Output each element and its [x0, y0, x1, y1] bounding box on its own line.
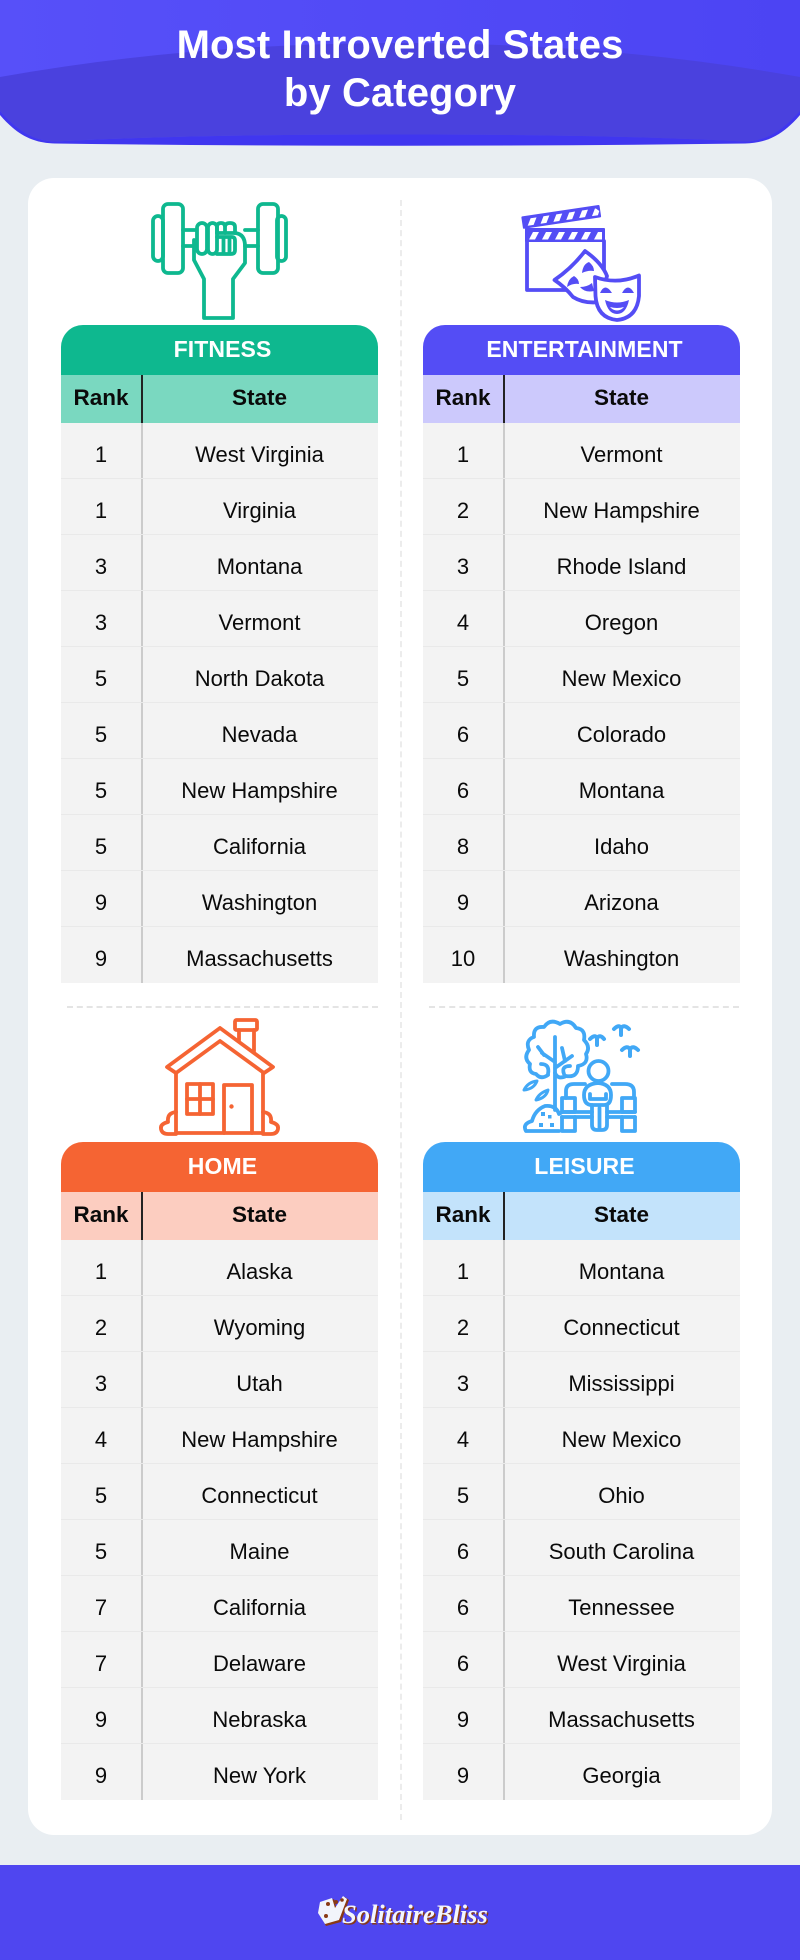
leisure rows: Connecticut — [563, 1315, 680, 1340]
icon: person on park bench under tree — [522, 1020, 640, 1133]
entertainment rows: 8 — [457, 834, 469, 859]
entertainment rows: Rhode Island — [557, 554, 686, 579]
person — [588, 1061, 608, 1081]
entertainment rows: Oregon — [585, 610, 658, 635]
home rows: California — [213, 1595, 306, 1620]
entertainment rows: 5 — [457, 666, 469, 691]
column headers: Rank — [73, 385, 129, 410]
fitness rows: Nevada — [222, 722, 297, 747]
logo wordmark: SolitaireBliss — [342, 1899, 488, 1929]
column headers: State — [594, 1202, 649, 1227]
fitness rows: Montana — [217, 554, 302, 579]
fitness rows: Massachusetts — [186, 946, 333, 971]
home rows: Utah — [236, 1371, 283, 1396]
home rows: 7 — [95, 1651, 107, 1676]
leaves — [524, 1081, 548, 1100]
fitness rows: California — [213, 834, 306, 859]
panel: home table — [61, 1142, 378, 1800]
column headers: State — [232, 1202, 287, 1227]
entertainment rows: Idaho — [594, 834, 649, 859]
horizontal dashed divider left — [67, 1006, 378, 1008]
leisure rows: West Virginia — [557, 1651, 686, 1676]
clapper board — [525, 228, 605, 290]
fitness rows: 5 — [95, 722, 107, 747]
leisure rows: 6 — [457, 1595, 469, 1620]
heading: home — [61, 1142, 378, 1192]
entertainment rows: Washington — [564, 946, 679, 971]
icon: clapperboard with theatre masks — [521, 205, 641, 322]
title — [177, 23, 623, 115]
fitness rows: North Dakota — [195, 666, 324, 691]
column headers — [61, 1192, 378, 1240]
home rows: New Hampshire — [181, 1427, 338, 1452]
entertainment rows: 9 — [457, 890, 469, 915]
entertainment rows — [423, 423, 740, 983]
home rows: Alaska — [226, 1259, 293, 1284]
white content card — [28, 178, 772, 1835]
leisure rows: New Mexico — [562, 1427, 681, 1452]
heading: home: HOME — [188, 1153, 257, 1179]
entertainment rows: 4 — [457, 610, 469, 635]
fitness rows: 9 — [95, 946, 107, 971]
entertainment rows: 10 — [451, 946, 475, 971]
home rows: Wyoming — [214, 1315, 305, 1340]
fitness rows: Vermont — [219, 610, 300, 635]
fitness rows: 5 — [95, 778, 107, 803]
heading: leisure — [423, 1142, 740, 1192]
tree — [526, 1022, 588, 1077]
leisure rows — [423, 1240, 740, 1800]
leisure rows: 4 — [457, 1427, 469, 1452]
heading: entertainment — [423, 325, 740, 375]
entertainment rows: Colorado — [577, 722, 666, 747]
leisure rows: Georgia — [582, 1763, 661, 1788]
entertainment rows: New Mexico — [562, 666, 681, 691]
fitness rows: 3 — [95, 554, 107, 579]
column headers — [423, 375, 740, 423]
heading: fitness — [61, 325, 378, 375]
column headers: State — [594, 385, 649, 410]
icon: playing cards — [318, 1896, 349, 1926]
entertainment rows: 2 — [457, 498, 469, 523]
home rows: 4 — [95, 1427, 107, 1452]
column headers: Rank — [73, 1202, 129, 1227]
fitness rows — [61, 423, 378, 983]
leisure rows: South Carolina — [549, 1539, 694, 1564]
bush — [525, 1106, 562, 1131]
leisure rows: Montana — [579, 1259, 664, 1284]
home rows: New York — [213, 1763, 306, 1788]
tragedy mask — [554, 251, 607, 302]
clapper arm — [521, 205, 601, 229]
fitness rows: Virginia — [223, 498, 296, 523]
home rows: Maine — [230, 1539, 289, 1564]
entertainment rows: 1 — [457, 442, 469, 467]
panel: fitness table — [61, 325, 378, 983]
leisure rows: 1 — [457, 1259, 469, 1284]
leisure rows: Tennessee — [568, 1595, 675, 1620]
home rows: Delaware — [213, 1651, 306, 1676]
column headers: Rank — [435, 1202, 491, 1227]
fitness rows: 9 — [95, 890, 107, 915]
icon: house — [159, 1018, 280, 1136]
home rows: Nebraska — [212, 1707, 307, 1732]
panel: entertainment table — [423, 325, 740, 983]
heading: fitness: FITNESS — [174, 336, 271, 362]
birds — [590, 1036, 604, 1045]
fitness rows: 1 — [95, 442, 107, 467]
column headers — [61, 375, 378, 423]
home rows: 5 — [95, 1539, 107, 1564]
leisure rows: 3 — [457, 1371, 469, 1396]
fitness rows: 5 — [95, 666, 107, 691]
leisure rows: Ohio — [598, 1483, 645, 1508]
entertainment rows: 6 — [457, 778, 469, 803]
leisure rows: 2 — [457, 1315, 469, 1340]
entertainment rows: Vermont — [581, 442, 662, 467]
column headers — [423, 1192, 740, 1240]
home rows: 3 — [95, 1371, 107, 1396]
fitness rows: Washington — [202, 890, 317, 915]
entertainment rows: Arizona — [584, 890, 659, 915]
entertainment rows: 6 — [457, 722, 469, 747]
bench — [562, 1098, 635, 1112]
home rows: 9 — [95, 1763, 107, 1788]
fitness rows: 3 — [95, 610, 107, 635]
leisure rows: 9 — [457, 1707, 469, 1732]
leisure rows: 9 — [457, 1763, 469, 1788]
heading: entertainment: ENTERTAINMENT — [486, 336, 683, 362]
comedy mask — [595, 276, 639, 320]
fitness rows: New Hampshire — [181, 778, 338, 803]
horizontal dashed divider right — [429, 1006, 739, 1008]
vertical dashed divider — [400, 200, 402, 1820]
home rows: 9 — [95, 1707, 107, 1732]
leisure rows: Massachusetts — [548, 1707, 695, 1732]
leisure rows: 5 — [457, 1483, 469, 1508]
leisure rows: 6 — [457, 1651, 469, 1676]
leisure rows: 6 — [457, 1539, 469, 1564]
column headers: State — [232, 385, 287, 410]
header banner — [0, 0, 800, 146]
fitness rows: West Virginia — [195, 442, 324, 467]
entertainment rows: Montana — [579, 778, 664, 803]
column headers: Rank — [435, 385, 491, 410]
title: by Category — [284, 71, 516, 115]
logo: Solitaire Bliss — [318, 1896, 488, 1929]
leisure rows: Mississippi — [568, 1371, 675, 1396]
fitness rows: 5 — [95, 834, 107, 859]
fitness rows: 1 — [95, 498, 107, 523]
home rows: 7 — [95, 1595, 107, 1620]
home rows: 1 — [95, 1259, 107, 1284]
home rows: 5 — [95, 1483, 107, 1508]
entertainment rows: New Hampshire — [543, 498, 700, 523]
icon: dumbbell in fist — [151, 202, 288, 320]
home rows — [61, 1240, 378, 1800]
home rows: Connecticut — [201, 1483, 318, 1508]
home rows: 2 — [95, 1315, 107, 1340]
heading: leisure: LEISURE — [534, 1153, 635, 1179]
entertainment rows: 3 — [457, 554, 469, 579]
footer bar — [0, 1865, 800, 1960]
title: Most Introverted States — [177, 23, 623, 67]
panel: leisure table — [423, 1142, 740, 1800]
